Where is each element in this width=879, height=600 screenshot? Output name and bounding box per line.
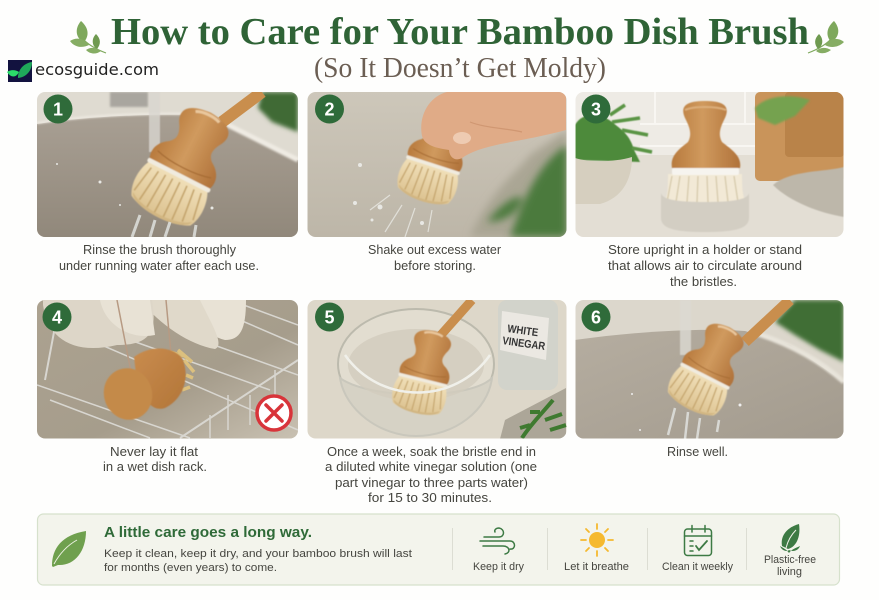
caption 5: part vinegar to three parts water) — [335, 476, 528, 490]
label: keep it dry: Keep it dry — [473, 561, 524, 573]
number badge 1 — [44, 94, 72, 124]
panel 5: soak in vinegar solution: WHITE — [507, 323, 539, 339]
caption 2 — [368, 243, 501, 273]
panel 5: soak in vinegar solution: VINEGAR — [502, 335, 546, 353]
caption 3: the bristles. — [670, 275, 737, 289]
panel 4: do not lay flat in dish rack — [37, 300, 298, 439]
footer panel — [38, 514, 840, 585]
number badge 2 — [315, 94, 344, 124]
icon: sun, let it breathe — [581, 524, 613, 556]
label: clean it weekly: Clean it weekly — [662, 561, 733, 573]
number badge 1: 1 — [53, 100, 63, 120]
footer message — [104, 548, 412, 574]
icon: green leaf — [52, 531, 86, 567]
caption 4 — [103, 445, 207, 474]
number badge 5 — [315, 302, 344, 332]
caption 1: under running water after each use. — [59, 259, 259, 273]
number badge 2: 2 — [324, 100, 335, 120]
subtitle: (So It Doesn’t Get Moldy) — [314, 52, 606, 84]
number badge 3 — [582, 94, 610, 124]
icon: wind, keep it dry — [480, 528, 514, 554]
panel 3: store upright in holder — [575, 92, 844, 237]
number badge 4 — [42, 302, 72, 332]
label: let it breathe: Let it breathe — [564, 561, 629, 573]
caption 3: Store upright in a holder or stand — [608, 243, 802, 257]
icon: right leaf sprig — [808, 21, 844, 53]
footer message: Keep it clean, keep it dry, and your bamboo brush will last — [104, 548, 412, 560]
number badge 4: 4 — [52, 308, 62, 328]
caption 5: for 15 to 30 minutes. — [368, 491, 492, 505]
label: plastic-free living: living — [777, 566, 802, 578]
caption 2: Shake out excess water — [368, 243, 501, 257]
label: plastic-free living — [764, 554, 816, 578]
icon: plant, plastic-free — [780, 524, 800, 553]
caption 5: Once a week, soak the bristle end in — [327, 445, 536, 459]
logo: ecosguide.com — [7, 60, 159, 82]
icon: left leaf sprig — [70, 21, 106, 54]
caption 3 — [608, 243, 802, 289]
caption 5: a diluted white vinegar solution (one — [325, 460, 537, 474]
caption 5 — [325, 445, 537, 505]
label: plastic-free living: Plastic-free — [764, 554, 816, 566]
footer message: for months (even years) to come. — [104, 562, 277, 574]
caption 6: Rinse well. — [667, 445, 728, 459]
title: How to Care for Your Bamboo Dish Brush — [111, 11, 809, 53]
caption 4: Never lay it flat — [110, 445, 199, 459]
caption 4: in a wet dish rack. — [103, 460, 207, 474]
caption 2: before storing. — [394, 259, 476, 273]
number badge 5: 5 — [324, 308, 335, 328]
footer heading: A little care goes a long way. — [104, 524, 312, 541]
panel 5: soak in vinegar solution — [307, 300, 567, 439]
icon: calendar, clean it weekly — [684, 526, 712, 556]
panel 2: shake out excess water — [307, 92, 567, 237]
number badge 3: 3 — [591, 100, 601, 120]
number badge 6 — [582, 302, 610, 332]
panel 6: rinse well — [575, 300, 844, 439]
caption 1: Rinse the brush thoroughly — [83, 243, 237, 257]
logo: ecosguide.com: ecosguide.com — [35, 60, 159, 79]
panel 1: rinse under running water — [37, 92, 298, 237]
caption 1 — [59, 243, 259, 273]
caption 3: that allows air to circulate around — [608, 259, 802, 273]
number badge 6: 6 — [591, 308, 601, 328]
icon: red cross warning — [257, 396, 291, 430]
